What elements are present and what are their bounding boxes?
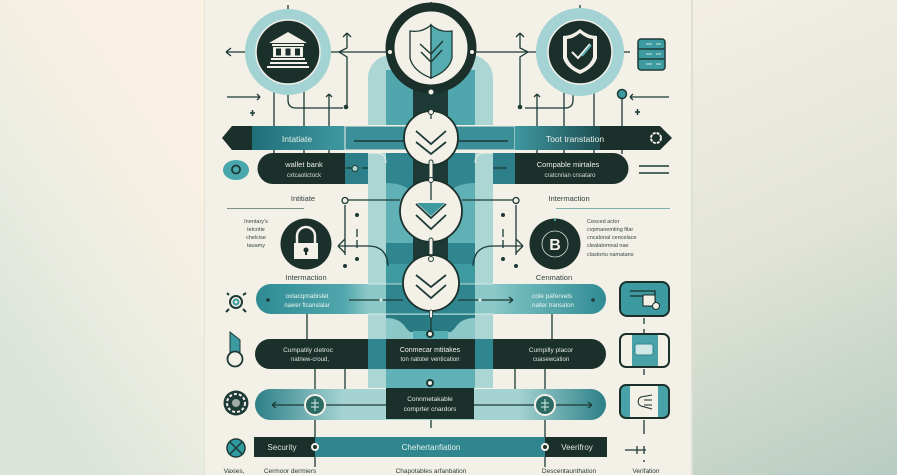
bottom labels — [224, 468, 660, 475]
row: gradient pill — [255, 388, 606, 420]
row: dark pill — [255, 339, 606, 369]
label: security: Security — [268, 443, 296, 452]
text: left note: tauamy — [247, 243, 265, 249]
bar: initiate — [222, 126, 672, 150]
row: dark pill: cuasewcation — [533, 357, 569, 363]
node left — [305, 395, 325, 415]
label: Conversation: Cenmation — [536, 273, 572, 282]
text: left: Cumpatily cletroc — [283, 347, 334, 354]
label: centre: Chehertanfiation — [402, 443, 460, 452]
icon: server stack — [638, 39, 665, 70]
icon: double line — [639, 166, 669, 173]
text: wallet bank: wallet bank — [284, 160, 323, 169]
heading: Intermediation — [548, 194, 670, 208]
connector node 1 to 2 — [429, 160, 433, 180]
row: dark pill: ton natoter ventication — [400, 357, 460, 363]
text: left pill: oxlacqmabislet — [286, 293, 329, 300]
connectors middle — [338, 200, 523, 266]
icon: orbital node — [226, 293, 246, 312]
icon: flag and ring — [228, 332, 242, 366]
icon: bitcoin: B — [549, 237, 561, 254]
connector lines top — [226, 2, 669, 154]
row: bottom bar — [254, 437, 607, 457]
text: left note — [244, 219, 268, 249]
junction dots top — [344, 105, 522, 109]
central circle nodes — [400, 110, 462, 318]
bar: wallet bank: cratcnrian cnsataro — [544, 173, 596, 179]
row: dark pill: natnew-croud, — [291, 357, 329, 363]
node dots centre — [427, 331, 433, 386]
text: right note: clealatomnal nae — [587, 243, 629, 249]
text: right note — [587, 219, 637, 258]
text: left note: chelcise — [246, 235, 266, 241]
central teal column — [368, 55, 493, 388]
icon: signal card — [620, 385, 669, 418]
icon: left oval — [223, 160, 249, 180]
text: right note: clastortu namatans — [587, 252, 634, 258]
icon: dotted medallion — [224, 390, 248, 416]
centre link below pill — [386, 314, 475, 339]
node 2 chevrons — [400, 178, 462, 242]
text: left note: Inentary's — [244, 219, 268, 225]
heading: Initiate: Intitiate — [291, 194, 315, 203]
label: Tool translation: Toot transtation — [546, 134, 604, 144]
icon: right shield in circle — [536, 8, 624, 96]
heading: Intermediation: Intermaction — [548, 194, 590, 203]
text: compatible mistakes: Compable mirtales — [537, 160, 600, 169]
vertical links — [307, 311, 552, 467]
icon: card window — [620, 282, 669, 316]
icon: bank in circle — [245, 9, 331, 95]
label: Intermediation: Intermaction — [285, 273, 327, 282]
text: right note: cncalonal cencelace — [587, 235, 637, 241]
text: centre: Conmecar mtitakes — [400, 347, 461, 354]
bottom labels: Vaxies, — [224, 468, 245, 475]
icon: central shield — [388, 7, 474, 94]
icon: chat card — [620, 334, 669, 367]
node 1 chevrons — [404, 110, 458, 165]
text: right note: Cesced actor — [587, 219, 620, 225]
icon: gear — [651, 133, 661, 143]
bar: wallet bank: cxtcaotictock — [287, 173, 322, 179]
icon: padlock — [280, 218, 332, 270]
icon: pin node — [618, 90, 626, 98]
label: verify: Veerifroy — [561, 443, 593, 452]
icon: bitcoin — [530, 218, 580, 270]
row: teal pill: nawer ftcanslalar — [284, 303, 330, 309]
text: centre: Connmetakable — [407, 396, 453, 403]
text: right: Cumpilly placor — [529, 347, 574, 354]
heading: Initiate — [227, 194, 315, 208]
text: right note: cvpmanemting filar — [587, 227, 633, 233]
bottom labels: Cermoor dermiers — [264, 468, 317, 475]
icon: teal cross circle — [227, 439, 245, 457]
bar: wallet bank — [258, 153, 628, 184]
node 3 chevrons — [403, 255, 459, 318]
bottom labels: Descentaunthation — [542, 468, 596, 475]
node right — [535, 395, 555, 415]
row: gradient pill: comprter cnardors — [404, 406, 457, 413]
label: Initiate: Intatiate — [282, 134, 312, 144]
bottom labels: Verifation — [632, 468, 660, 475]
row: teal pill: nalter transaton — [532, 303, 574, 309]
icon: verify connector — [625, 318, 646, 462]
bottom labels: Chapotables arfanbation — [396, 468, 467, 475]
row: teal pill — [256, 284, 606, 314]
text: right pill: cole pafervels — [532, 293, 573, 300]
middle dots — [342, 198, 519, 268]
text: left note: tetcntie — [247, 227, 265, 233]
connector node 2 to 3 — [429, 238, 433, 258]
